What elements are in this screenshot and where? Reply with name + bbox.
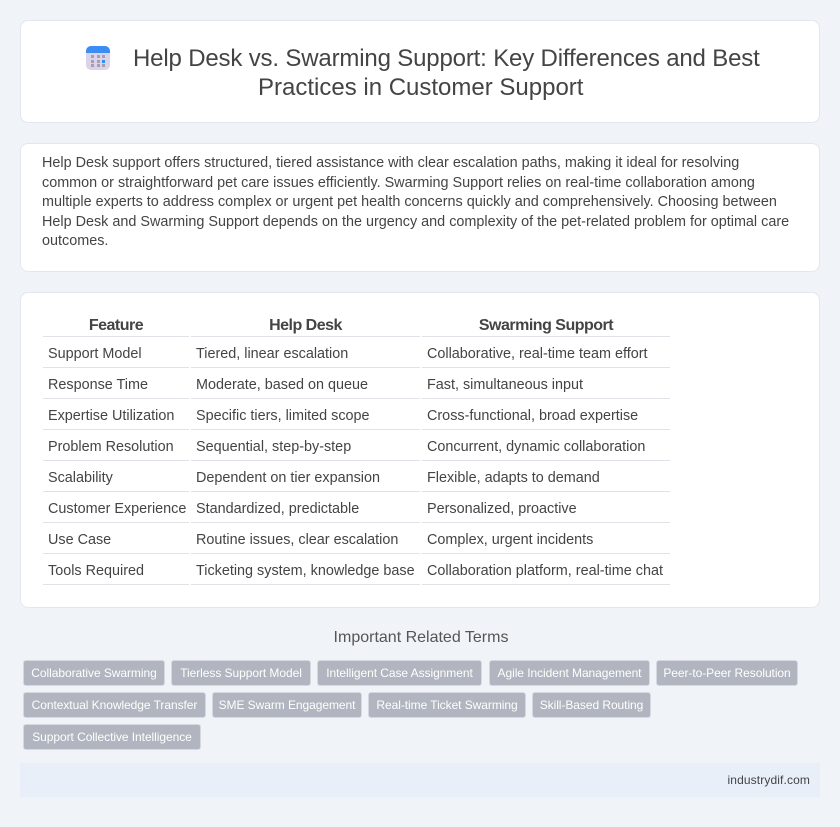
related term chips (23, 660, 798, 750)
table rows: Response Time (48, 377, 148, 393)
comparison table (43, 317, 670, 585)
table rows: Scalability (48, 470, 113, 486)
related term chips: Collaborative Swarming (31, 666, 157, 680)
table rows: Collaboration platform, real-time chat (427, 563, 663, 579)
table rows: Tiered, linear escalation (196, 346, 348, 362)
panel: comparison table (20, 292, 820, 608)
panel: description (20, 143, 820, 272)
table rows: Complex, urgent incidents (427, 532, 593, 548)
table rows: Routine issues, clear escalation (196, 532, 398, 548)
table rows: Customer Experience (48, 501, 186, 517)
table rows (43, 336, 670, 585)
table heading row (89, 317, 614, 334)
description text: Help Desk support offers structured, tiered assistance with clear escalation paths, making it ideal for resolving (42, 155, 739, 171)
description text: Help Desk and Swarming Support depends on the urgency and complexity of the pet-related problem for optimal care (42, 214, 789, 230)
footer bar (20, 763, 820, 797)
header panel (20, 20, 820, 123)
text: Practices in Customer Support (258, 74, 583, 101)
table rows: Ticketing system, knowledge base (196, 563, 415, 579)
table rows: Cross-functional, broad expertise (427, 408, 638, 424)
related term chips: Contextual Knowledge Transfer (32, 698, 197, 712)
description text: outcomes. (42, 233, 108, 249)
related term chips: SME Swarm Engagement (219, 698, 355, 712)
table rows: Expertise Utilization (48, 408, 174, 424)
table heading row: Feature (89, 317, 143, 334)
icon: calendar (86, 46, 110, 70)
related term chips: Tierless Support Model (180, 666, 302, 680)
text: Help Desk vs. Swarming Support: Key Differences and Best (133, 45, 760, 72)
related term chips: Real-time Ticket Swarming (376, 698, 518, 712)
related term chips: Agile Incident Management (498, 666, 641, 680)
table heading row: Help Desk (269, 317, 342, 334)
footer source: industrydif.com (728, 773, 810, 787)
table rows: Personalized, proactive (427, 501, 577, 517)
table rows: Fast, simultaneous input (427, 377, 583, 393)
description text (42, 155, 789, 249)
description text: multiple experts to address complex or urgent pet health concerns quickly and comprehensively. Choosing between (42, 194, 777, 210)
table rows: Collaborative, real-time team effort (427, 346, 647, 362)
related term chips: Intelligent Case Assignment (326, 666, 473, 680)
table rows: Sequential, step-by-step (196, 439, 351, 455)
title (133, 45, 760, 101)
table rows: Flexible, adapts to demand (427, 470, 600, 486)
heading: related terms: Important Related Terms (334, 629, 508, 646)
table rows: Concurrent, dynamic collaboration (427, 439, 645, 455)
related term chips: Peer-to-Peer Resolution (663, 666, 791, 680)
table rows: Tools Required (48, 563, 144, 579)
table rows: Dependent on tier expansion (196, 470, 380, 486)
table rows: Standardized, predictable (196, 501, 359, 517)
related term chips: Skill-Based Routing (540, 698, 643, 712)
table rows: Problem Resolution (48, 439, 174, 455)
table rows: Specific tiers, limited scope (196, 408, 370, 424)
related term chips: Support Collective Intelligence (32, 730, 192, 744)
table rows: Support Model (48, 346, 142, 362)
description text: common or straightforward pet care issues efficiently. Swarming Support relies on real-time collaboration among (42, 175, 755, 191)
table rows: Moderate, based on queue (196, 377, 368, 393)
table rows: Use Case (48, 532, 111, 548)
table heading row: Swarming Support (479, 317, 613, 334)
